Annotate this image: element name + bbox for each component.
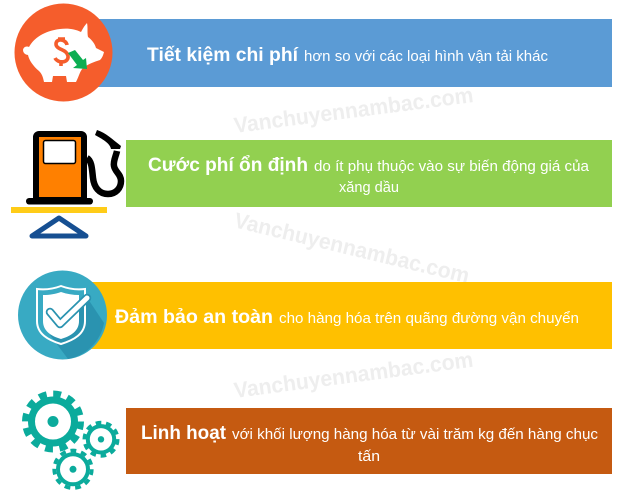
text: cargo safety [115,307,579,328]
text: stable freight cost: Cước phí ổn định [148,155,308,176]
watermark 2: Vanchuyennambac.com [232,208,472,288]
icon: gears [26,394,118,488]
panel: blue bar [97,19,612,87]
text: stable freight cost: do ít phụ thuộc vào sự biến động giá của [314,158,590,175]
text: cost saving: hơn so với các loại hình vận tải khác [304,48,548,65]
panel: brown bar [126,408,612,474]
icon: shield [18,270,107,360]
panel: yellow bar [90,282,612,349]
text: cost saving: Tiết kiệm chi phí [147,45,299,66]
text: flexibility: với khối lượng hàng hóa từ vài trăm kg đến hàng chục [232,426,598,443]
icon: piggy bank [14,4,112,102]
panel: green bar [126,140,612,207]
icon: fuel pump [11,130,121,236]
text: cargo safety: Đảm bảo an toàn [115,307,273,328]
text: flexibility: Linh hoạt [141,423,227,444]
text: cargo safety: cho hàng hóa trên quãng đường vận chuyển [279,310,579,327]
text: stable freight cost: xăng dầu [339,179,399,196]
text: flexibility [141,423,598,465]
text: stable freight cost [148,155,590,196]
watermark 3: Vanchuyennambac.com [232,347,475,403]
watermark 1: Vanchuyennambac.com [232,82,475,138]
text: flexibility: tấn [358,448,380,465]
text: cost saving [147,45,548,66]
